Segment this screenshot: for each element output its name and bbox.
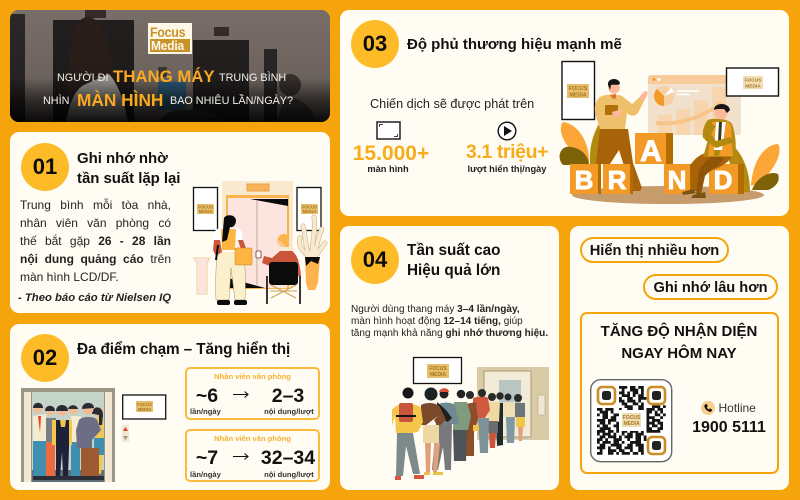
group of office workers — [33, 403, 104, 480]
number badge 04 — [351, 236, 399, 284]
plants — [560, 122, 780, 192]
heading 02: Đa điểm chạm – Tăng hiển thị — [77, 341, 290, 358]
right wall screen: MEDIA — [303, 209, 316, 214]
icon: phone — [701, 401, 715, 415]
stat label: screens: màn hình — [367, 164, 409, 174]
queue of people — [392, 388, 525, 480]
illustration: people in elevator — [21, 388, 115, 482]
left wall screen — [194, 188, 218, 230]
seated thinker — [682, 104, 736, 198]
body text 04: Người dùng thang máy 3–4 lần/ngày, — [351, 304, 520, 315]
standing presenter — [595, 79, 648, 191]
arrow — [233, 391, 249, 398]
arrow — [233, 453, 249, 460]
BRAND letter blocks: R — [608, 165, 627, 195]
heading 04: Tần suất cao — [407, 242, 501, 259]
hotline label: Hotline — [718, 401, 756, 415]
value ~7: ~7 — [196, 447, 218, 469]
QR code: FOCUS — [622, 414, 640, 420]
right wall screen: FOCUS — [302, 204, 317, 210]
BRAND letter blocks: N — [668, 165, 686, 195]
body text 01: Trung bình mỗi tòa nhà, — [20, 198, 171, 212]
left wall screen: FOCUS — [198, 204, 213, 210]
illustration: queue at the elevator — [392, 356, 549, 480]
unit lan/ngay: lần/ngày — [190, 470, 221, 479]
pill: display more: Hiển thị nhiều hơn — [590, 243, 719, 259]
panel 05: call to action — [570, 226, 789, 490]
stat card: 2-3 content per ride — [185, 367, 320, 420]
headline line 2: NHÌN — [43, 95, 69, 107]
phone-format screen — [562, 62, 594, 120]
logo: Focus Media — [148, 23, 192, 54]
CTA heading — [600, 322, 757, 362]
hero banner — [10, 10, 330, 122]
intro sentence: Chiến dịch sẽ được phát trên — [370, 97, 534, 111]
headline line 2: BAO NHIÊU LẦN/NGÀY? — [170, 95, 293, 107]
number badge 03: 03 — [363, 31, 387, 56]
phone-format screen: FOCUS — [569, 86, 588, 92]
ground shadow — [572, 186, 764, 204]
unit noi dung/luot: nội dung/lượt — [264, 470, 314, 479]
source note: - Theo báo cáo từ Nielsen IQ — [18, 292, 171, 304]
BRAND letter blocks: A — [640, 135, 662, 168]
pill: display more — [580, 237, 729, 263]
value 32-34: 32–34 — [261, 447, 315, 469]
hotline number: 1900 5111 — [692, 419, 766, 436]
outdoor screen in panel 02: MEDIA — [138, 407, 151, 412]
landscape screen: MEDIA — [745, 84, 761, 90]
illustration: BRAND blocks with two businessmen — [560, 60, 780, 204]
number badge 03 — [351, 20, 399, 68]
pill: remember longer — [643, 274, 778, 300]
headline line 2: MÀN HÌNH — [77, 90, 163, 110]
stat: screens: 15.000+ — [353, 142, 429, 165]
headline line 1 — [57, 67, 286, 86]
outdoor screen in panel 02 — [122, 394, 166, 442]
illustration: elevator lobby with woman and wheelchair user — [192, 181, 328, 305]
logo: Focus Media: Media — [151, 38, 184, 53]
left wall screen: MEDIA — [199, 209, 212, 214]
right wall screen — [297, 188, 321, 230]
panel 04: high frequency — [340, 226, 559, 490]
elevator call buttons — [122, 425, 129, 442]
number badge 04: 04 — [363, 247, 387, 272]
background dashboard chart — [648, 75, 741, 135]
body text 01: thế bắt gặp 26 - 28 lần — [20, 234, 171, 248]
heading 03: Độ phủ thương hiệu mạnh mẽ — [407, 36, 622, 53]
CTA box — [580, 312, 779, 474]
potted plant — [299, 217, 325, 290]
lobby screen — [414, 358, 462, 384]
hero photo: elevator lobby — [10, 10, 330, 122]
QR code: MEDIA — [623, 420, 639, 426]
logo: Focus Media: Focus — [150, 25, 185, 40]
unit lan/ngay: lần/ngày — [190, 407, 221, 416]
value 2-3: 2–3 — [272, 385, 304, 407]
BRAND letter blocks — [570, 133, 744, 195]
body text 01 — [20, 198, 171, 284]
panel 03: brand coverage — [340, 10, 789, 216]
headline line 1: NGƯỜI ĐI — [57, 72, 108, 84]
landscape screen — [726, 68, 778, 96]
number badge 02 — [21, 334, 69, 382]
number badge 02: 02 — [33, 345, 57, 370]
lobby screen: FOCUS — [429, 366, 447, 372]
heading 01: Ghi nhớ nhờ — [77, 150, 168, 167]
lobby screen: MEDIA — [430, 372, 446, 378]
headline line 1: TRUNG BÌNH — [219, 72, 286, 84]
card caption: Nhân viên văn phòng — [214, 372, 291, 381]
phone-format screen: MEDIA — [569, 92, 587, 98]
icon: screen — [376, 121, 401, 140]
landscape screen: FOCUS — [745, 78, 762, 84]
value ~6: ~6 — [196, 385, 218, 407]
outdoor screen in panel 02: FOCUS — [137, 402, 152, 407]
unit noi dung/luot: nội dung/lượt — [264, 407, 314, 416]
wheelchair user — [256, 234, 301, 304]
panel 01: repetition — [10, 132, 330, 313]
headline line 2 — [43, 90, 293, 110]
number badge 01 — [21, 143, 69, 191]
QR code — [590, 379, 672, 462]
heading 04 — [407, 242, 501, 279]
body text 04: màn hình hoạt động 12–14 tiếng, giúp — [351, 316, 523, 327]
elevator — [477, 367, 549, 440]
stat label: impressions: lượt hiển thị/ngày — [468, 164, 546, 174]
stat card: 32-34 content per ride — [185, 429, 320, 482]
heading 01: tần suất lặp lại — [77, 170, 180, 186]
number badge 01: 01 — [33, 154, 57, 179]
body text 01: nhân viên văn phòng có — [20, 216, 171, 230]
panel 02: touchpoints — [10, 324, 330, 490]
body text 04: tăng mạnh khả năng ghi nhớ thương hiệu. — [351, 328, 548, 339]
stat: impressions: 3.1 triệu+ — [466, 141, 548, 163]
body text 04 — [351, 304, 548, 339]
heading 04: Hiệu quả lớn — [407, 262, 500, 279]
woman with parcel — [213, 215, 252, 305]
BRAND letter blocks: D — [714, 165, 732, 195]
card caption: Nhân viên văn phòng — [214, 434, 291, 443]
CTA heading: TĂNG ĐỘ NHẬN DIỆN — [601, 323, 757, 340]
headline line 1: THANG MÁY — [113, 67, 215, 86]
pill: remember longer: Ghi nhớ lâu hơn — [654, 280, 767, 296]
BRAND letter blocks: B — [575, 165, 593, 195]
icon: play — [498, 122, 516, 140]
heading 01 — [77, 150, 180, 186]
CTA heading: NGAY HÔM NAY — [621, 344, 737, 362]
body text 01: nội dung quảng cáo trên — [20, 252, 171, 266]
waste bin — [194, 258, 210, 294]
body text 01: màn hình LCD/DF. — [20, 270, 119, 284]
